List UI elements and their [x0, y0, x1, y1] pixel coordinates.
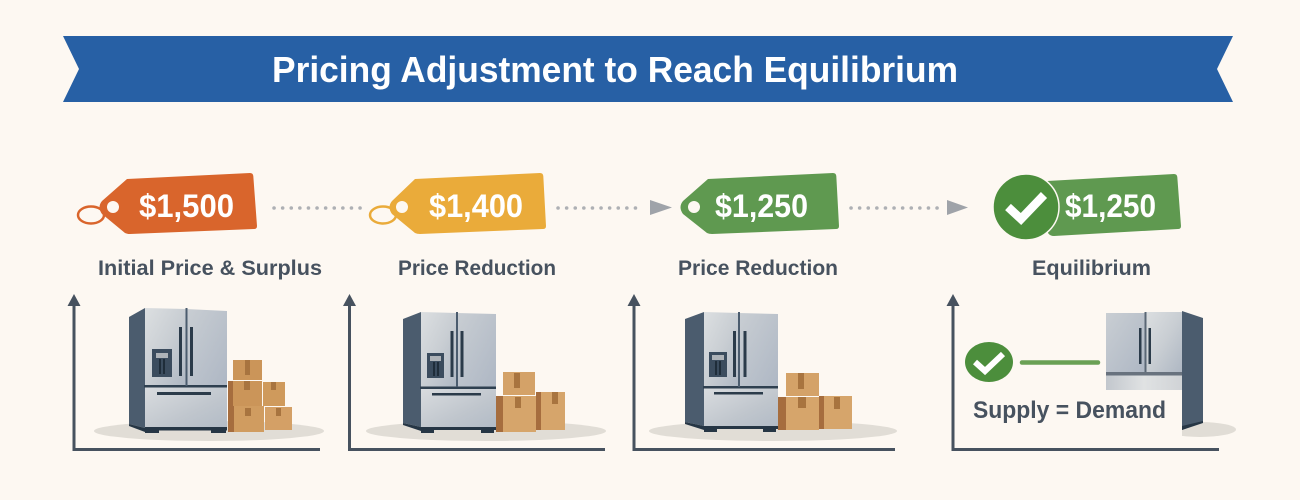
arrow connector 3	[851, 200, 968, 215]
panel: equilibrium chart	[946, 294, 1236, 450]
panel: third price chart	[628, 294, 897, 450]
step 2: price tag $1,400	[370, 173, 546, 234]
dotted connector 1	[274, 206, 366, 210]
icon: stack of boxes	[496, 372, 565, 432]
icon: stack of boxes	[778, 373, 852, 430]
equals line	[1022, 360, 1098, 365]
arrow connector 2	[558, 200, 672, 215]
label: price reduction 2: Price Reduction	[678, 257, 838, 280]
step 3: price tag $1,250	[680, 173, 839, 234]
label: price reduction 1: Price Reduction	[398, 257, 556, 280]
chart axes	[628, 294, 895, 450]
title banner	[63, 36, 1233, 102]
icon: refrigerator	[403, 312, 496, 433]
panel: initial surplus chart	[68, 294, 324, 450]
label: equilibrium: Equilibrium	[1032, 257, 1151, 280]
step 2: price tag $1,400: $1,400	[429, 188, 523, 224]
step 4: equilibrium tag with check badge	[993, 174, 1181, 240]
chart axes	[343, 294, 605, 450]
icon: check badge	[993, 174, 1059, 240]
step 3: price tag $1,250: $1,250	[715, 188, 808, 224]
icon: stack of boxes	[228, 360, 292, 432]
step 1: price tag $1,500	[78, 173, 257, 234]
icon: refrigerator	[129, 308, 227, 433]
step 1: price tag $1,500: $1,500	[139, 188, 234, 224]
title: Pricing Adjustment to Reach Equilibrium	[272, 49, 958, 90]
chart axes	[946, 294, 1219, 450]
supply equals demand text: Supply = Demand	[973, 397, 1166, 424]
step 4: equilibrium tag with check badge: $1,250	[1065, 188, 1156, 224]
chart axes	[68, 294, 320, 450]
icon: refrigerator	[685, 312, 778, 432]
label: initial price and surplus: Initial Price & Surplus	[98, 257, 322, 280]
panel: second price chart	[343, 294, 606, 450]
icon: check badge	[965, 342, 1013, 382]
icon: refrigerator top	[1106, 311, 1203, 430]
